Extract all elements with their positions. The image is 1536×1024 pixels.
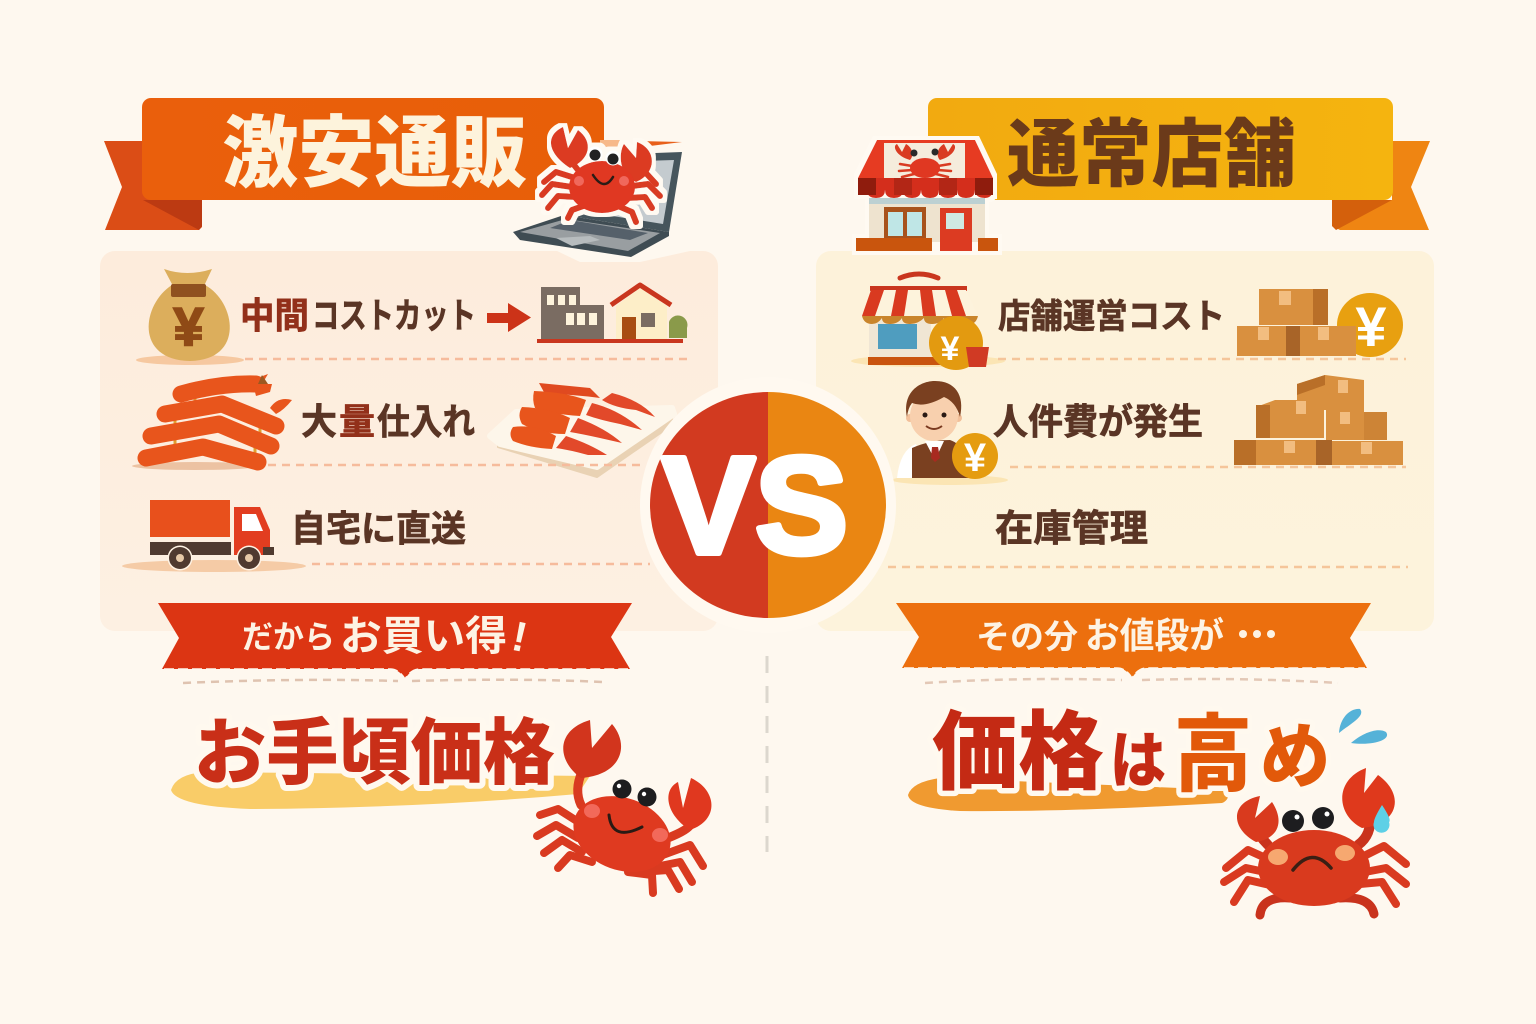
ellipsis [1239,630,1275,638]
divider row 1 right [998,358,1406,360]
icon: sweat drops [1339,709,1387,744]
label: 大量仕入れ [301,393,475,445]
icon: plate of crab meat [490,383,674,477]
icon: cyan sweat drop [1374,805,1390,833]
left banner: だからお買い得!: ! [508,612,531,661]
left dashed arc under banner [183,680,603,683]
icon: small shop with coin [851,274,1005,370]
icon: stacked cardboard boxes [1234,375,1403,465]
panel: left reasons background [100,251,718,631]
VS badge [640,377,896,633]
row: 中間コストカット [136,269,687,365]
icon: worried crab [1224,768,1406,915]
icon: crab shop storefront [856,140,998,251]
title: 激安通販: 激安通販 [222,91,527,203]
divider row 1 left [245,358,690,360]
icon: happy crab [537,720,712,893]
row: 在庫管理: 在庫管理 [995,498,1148,552]
icon: boxes with yen coin: ¥ [1355,295,1387,358]
right result: 価格は高め: め [1260,698,1330,803]
panel: right reasons background [816,251,1434,631]
right result: 価格は高め: は [1110,710,1166,800]
highlight swash [908,778,1228,811]
label: 大量仕入れ: 大 [301,393,337,445]
icon: shop clerk with coin [892,381,1008,485]
icon: small shop with coin: ¥ [941,330,960,368]
divider row 3 left [312,563,650,565]
icon: money bag: ¥ [173,297,204,357]
label: 中間コストカット: 中間 [240,287,309,339]
icon: crab in laptop [513,127,690,262]
row: 店舗運営コスト [851,274,1403,370]
right banner: その分お値段が…: その分 [976,610,1078,658]
left header ribbon: 激安通販 [104,91,604,230]
icon: stacked crab legs [132,374,292,470]
row: 人件費が発生 [892,375,1403,485]
right header ribbon: 通常店舗 [928,95,1430,230]
icon: building and house [537,285,687,343]
title: 通常店舗: 通常店舗 [1007,95,1296,202]
label: 自宅に直送: 自宅に直送 [291,500,466,552]
label: 人件費が発生: 人件費が発生 [993,393,1203,445]
left banner: だからお買い得!: お買い得 [340,602,507,662]
right result: 価格は高め: 価格 [932,682,1104,807]
label: 中間コストカット: コストカット [312,288,476,339]
icon: money bag [136,269,244,365]
right dashed arc under banner [925,679,1338,683]
divider row 2 left [268,464,640,466]
left result: お手頃価格: お手頃価格 [194,694,555,799]
row: 自宅に直送 [122,500,466,572]
right banner: その分お値段が… [896,603,1371,678]
label: 中間コストカット [240,287,476,339]
icon: delivery truck [122,500,306,572]
right banner: その分お値段が…: お値段が [1085,607,1224,659]
label: 大量仕入れ: 量 [339,393,375,445]
label: 店舗運営コスト: 店舗運営コスト [998,289,1225,338]
row: 大量仕入れ [132,374,674,477]
icon: shop clerk with coin: ¥ [964,436,987,480]
VS badge: VS [662,429,848,583]
right result: 価格は高め: 高 [1174,688,1252,809]
label: 大量仕入れ: 仕入れ [377,393,475,445]
icon: boxes with yen coin [1237,289,1403,358]
highlight swash [171,772,590,809]
left banner: だからお買い得!: だから [242,612,335,658]
divider row 2 right [1010,466,1406,468]
right result: 価格は高め [908,682,1330,811]
divider row 3 right [888,566,1408,568]
centre dashed divider [766,656,768,852]
arrow [487,303,531,332]
left banner: だからお買い得! [158,602,632,679]
